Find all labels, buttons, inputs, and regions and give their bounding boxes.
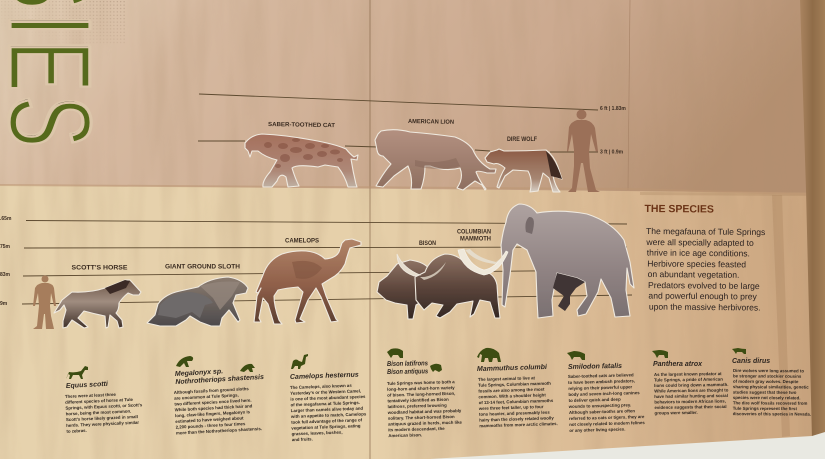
description: relying on their powerful upper [568,384,633,391]
intro paragraph: were all specially adapted to [645,237,754,248]
panel: equus scotti [65,366,144,434]
description: to zebras. [66,428,87,434]
description: 2,200 pounds - three to four times [176,421,246,430]
label: american lion: AMERICAN LION [408,119,454,126]
intro paragraph: and powerful enough to prey [648,291,758,301]
description: two different species once lived here. [174,398,252,407]
description: woodland habitat and was probably [387,408,462,415]
description: more than the Nothrotheriops shastensis. [176,426,262,436]
intro paragraph: Predators evolved to be large [648,280,760,291]
species name: Panthera atrox [653,361,703,368]
description: different species of horse at Tule [65,397,134,405]
description: vegetation at Tule Springs, eating [291,423,361,431]
description: herds. They were physically similar [66,420,139,428]
heading: the species: THE SPECIES [644,203,714,215]
species name: Camelops hesternus [290,372,359,381]
human silhouette: upper scale [567,110,600,192]
description: referred to as cats or tigers, they are [569,414,645,421]
label: giant ground sloth: GIANT GROUND SLOTH [165,264,240,270]
icon: saber-toothed cat [567,351,585,360]
panel: panthera atrox [652,350,729,415]
animal: rear bison [397,254,500,318]
species names: Megalonyx sp. [175,368,223,378]
icon: horse [66,366,88,379]
description: to deliver quick and deep [569,397,621,403]
label: scott's horse: SCOTT'S HORSE [72,266,128,272]
description: are uncommon at Tule Springs, [174,392,239,401]
description: wounds to unsuspecting prey. [568,402,631,409]
panel: megalonyx and nothrotheriops [174,356,264,436]
description: evidence suggests that their social [654,404,727,410]
description: While American lions are thought to [654,387,729,393]
animal: front bison [377,260,430,319]
description: latifrons, preferred browsing [388,403,447,409]
label: camelops: CAMELOPS [285,238,319,244]
description: Saber-toothed cats are believed [568,372,634,379]
intro paragraph: thrive in ice age conditions. [647,248,750,258]
icon: large sloth [176,356,193,367]
description: The Camelops, also known as [290,383,352,390]
intro paragraph: The megafauna of Tule Springs [646,226,765,237]
description: Tule Springs, Columbian mammoth [478,381,551,388]
description: hairy than the closely related woolly [479,415,554,423]
description: Although saber-tooths are often [569,408,635,415]
description: species were not closely related. [733,395,800,400]
description: Larger than camels alive today and [291,406,364,413]
description: Springs, with Equus scotti, or Scott's [65,402,143,411]
scale label: 1.65m: .65m [0,216,12,222]
intro paragraph: upon the massive herbivores. [649,302,761,313]
description: groups were smaller. [654,410,698,415]
label: columbian mammoth: COLUMBIAN [457,230,491,236]
description: of the megafauna at Tule Springs. [290,400,360,407]
intro paragraph: on abundant vegetation. [648,269,739,280]
description: sharing physical similarities, genetic [733,384,809,390]
panel: the species intro [644,203,765,313]
species name: Smilodon fatalis [568,363,622,371]
icon: lion [652,350,668,358]
description: with an appetite to match, Camelops [290,411,367,419]
icon: mammoth [477,348,501,362]
panel: smilodon fatalis [567,351,646,433]
icon: small sloth [240,364,255,372]
description: discoveries of this species in Nevada. [733,411,811,417]
description: Tule Springs was home to both a [387,379,455,386]
scale label: 3 ft: 3 ft | 0.9m [600,150,624,156]
animal: giant ground sloths [147,277,248,326]
animal: dire wolf [485,149,562,192]
panel: mammuthus columbi [477,348,558,428]
description: The dire wolf fossils recovered from [733,400,808,406]
label: columbian mammoth: MAMMOTH [460,236,491,242]
description: tons heavier, and presumably less [479,410,550,417]
animal: saber-toothed cat [245,134,358,187]
floor strip [430,432,825,459]
scale label: 0.83m: 83m [0,272,11,278]
intro paragraph: Herbivore species feasted [647,259,746,269]
icon: small bison [430,364,442,372]
description: is one of the most abundant species [290,394,366,402]
label: saber-toothed cat: SABER-TOOTHED CAT [268,122,335,129]
lower animal labels [72,230,491,272]
human silhouette: lower scale [33,276,56,329]
species names: Bison latifrons [387,360,428,368]
description: not closely related to modern felines [569,420,645,427]
scale label: 0.75m: 75m [0,244,11,250]
description: have had similar hunting and social [654,393,728,399]
icon: camel [291,354,308,369]
panel: camelops hesternus [289,354,368,442]
description: horse, being the most common. [66,409,131,416]
animal: american lion [375,130,496,190]
description: Scott's horse likely grazed in small [66,414,138,422]
description: lions could bring down a mammoth. [654,382,728,388]
species names: Nothrotheriops shastensis [175,374,264,386]
animal: columbian mammoth [458,204,634,318]
animal: camelops [254,239,361,324]
icon: wolf [732,348,746,354]
species name: Canis dirus [732,358,770,365]
description: of 13-14 feet, Columbian mammoths [479,398,554,405]
scale lines: upper predators panel [198,94,598,152]
panel: bison [386,348,463,438]
description: estimated to have weighed about [175,415,244,424]
scale lines: lower herbivores panel [22,220,632,304]
description: Tule Springs, a pride of American [654,377,723,382]
description: tentatively identified as Bison [387,397,449,403]
description: long-horn and short-horn variety [387,385,455,392]
description: antiquus grazed in herds, much like [388,420,463,427]
description: Dire wolves were long assumed to [733,368,804,373]
description: The largest animal to live at [478,375,536,382]
label: dire wolf: DIRE WOLF [507,137,537,143]
species names: Bison antiquus [387,368,428,376]
description: to have been ambush predators, [568,378,635,385]
upper animal labels [268,119,537,143]
panel: canis dirus [732,348,811,417]
description: mammoths from more arctic climates. [479,421,558,428]
description: and fruits. [292,436,313,442]
icon: large bison [387,348,403,358]
description: Tule Springs represent the first [733,406,797,411]
description: fossils are also among the most [478,387,545,394]
description: common. With a shoulder height [478,392,546,399]
description: American bison. [388,432,422,438]
species name: Mammuthus columbi [477,364,548,373]
description: of modern gray wolves. Despite [733,379,799,384]
description: behaviors to modern African lions, [654,398,726,404]
description: body and seven-inch-long canines [568,390,640,397]
label: bison: BISON [419,241,436,247]
description: There were at least three [65,392,117,399]
scale label: 0.9m: 9m [0,301,8,307]
description: took full advantage of the range of [291,417,363,425]
animal: scott's horse [54,280,141,328]
description: were three feet taller, up to four [478,404,544,411]
description: be stronger and stockier cousins [733,373,802,379]
description: grasses, leaves, bushes, [291,430,343,436]
scale label: 6 ft: 6 ft | 1.83m [600,106,626,112]
description: Although fossils from ground sloths [174,386,249,395]
description: or any other living species. [569,427,625,433]
description: its modern descendant, the [388,426,445,432]
description: long, claw-like fingers, Megalonyx is [175,409,251,418]
species name: Equus scotti [66,381,109,390]
description: As the largest known predator at [654,371,722,377]
description: of bison. The long-horned Bison, [387,391,455,398]
description: studies suggest that these two [733,390,797,395]
description: Yesterday's or the Western Camel, [290,388,361,396]
description: solitary. The short-horned Bison [388,414,455,421]
description: While both species had thick hair and [175,403,253,412]
